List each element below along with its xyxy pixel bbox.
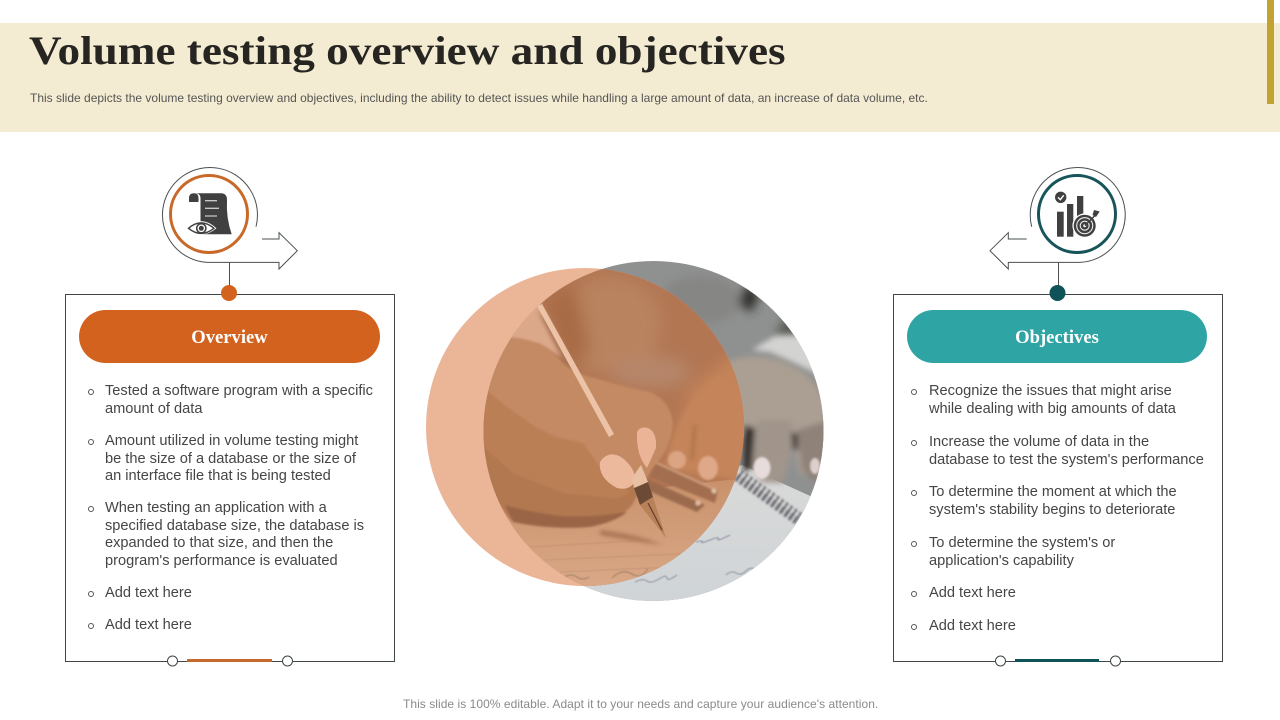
objectives bullet list	[911, 383, 1204, 634]
subtitle: This slide depicts the volume testing overview and objectives, including the ability to detect issues while handling a large amount of data, an increase of data volume, etc.	[30, 91, 928, 105]
overview connector dot	[221, 285, 237, 301]
notebook spiral	[738, 471, 803, 522]
overview bullet list: expanded to that size, and then the	[105, 535, 333, 551]
middle finger band	[484, 394, 627, 497]
writing hand nails	[637, 428, 656, 468]
overview bullet list: an interface file that is being tested	[105, 468, 331, 484]
panel: overview	[65, 294, 395, 662]
closed pen	[647, 462, 718, 512]
paper in overlap	[502, 480, 735, 586]
overview bullet list: When testing an application with a	[105, 500, 327, 516]
light area behind pen	[511, 304, 568, 362]
objectives bullet list: Add text here	[929, 618, 1016, 634]
paper	[584, 465, 810, 601]
overview bullet list: Add text here	[105, 617, 192, 633]
overview bullet list: program's performance is evaluated	[105, 553, 338, 569]
icon: overview document with eye	[170, 176, 248, 252]
overview bullet list	[88, 383, 373, 633]
objectives bullet list: database to test the system's performance	[929, 452, 1204, 468]
title: Volume testing overview and objectives	[29, 28, 786, 73]
objectives text box	[893, 294, 1223, 662]
overview bullet list: Amount utilized in volume testing might	[105, 433, 358, 449]
objectives bullet list: Recognize the issues that might arise	[929, 383, 1172, 399]
overview box bottom ornament	[168, 656, 292, 666]
overview bullet list: be the size of a database or the size of	[105, 451, 356, 467]
footer note: This slide is 100% editable. Adapt it to your needs and capture your audience's attention.	[403, 697, 878, 711]
writing hand	[480, 338, 673, 528]
overview text box	[65, 294, 395, 662]
objectives bullet list: Add text here	[929, 585, 1016, 601]
overview heading pill	[79, 310, 380, 363]
back hand	[729, 355, 824, 486]
central photo of hand writing with a pen	[426, 258, 830, 610]
overview connector and arrow	[162, 167, 297, 288]
peach overlay circle	[426, 268, 744, 586]
objectives bullet list: system's stability begins to deteriorate	[929, 502, 1175, 518]
objectives bullet list: while dealing with big amounts of data	[929, 401, 1176, 417]
objectives connector and arrow	[990, 167, 1125, 288]
overview bullet list: Add text here	[105, 585, 192, 601]
shadow under pen	[600, 530, 662, 545]
photo outside overlay	[584, 261, 824, 601]
objectives bullet list: To determine the system's or	[929, 535, 1115, 551]
header band	[0, 23, 1280, 132]
overview heading pill: Overview	[191, 327, 268, 348]
overview bullet list: amount of data	[105, 401, 202, 417]
handwriting on paper	[635, 535, 764, 582]
gold accent bar	[1267, 0, 1274, 104]
overview bullet list: specified database size, the database is	[105, 518, 364, 534]
panel: objectives	[893, 294, 1223, 662]
handwriting in overlap	[565, 568, 648, 580]
overview bullet list: Tested a software program with a specific	[105, 383, 373, 399]
right hand fingers	[666, 394, 744, 476]
index finger band	[488, 338, 674, 478]
objectives connector dot	[1050, 285, 1066, 301]
objectives heading pill	[907, 310, 1207, 363]
objectives bullet list: application's capability	[929, 553, 1074, 569]
icon: objectives bar chart with target	[1038, 176, 1116, 252]
back hand nails	[754, 457, 820, 479]
objectives bullet list: Increase the volume of data in the	[929, 434, 1149, 450]
fountain pen	[537, 304, 666, 538]
objectives bullet list: To determine the moment at which the	[929, 484, 1177, 500]
objectives box bottom ornament	[996, 656, 1120, 666]
objectives heading pill: Objectives	[1015, 327, 1099, 348]
overlap of photo and overlay	[484, 269, 744, 586]
